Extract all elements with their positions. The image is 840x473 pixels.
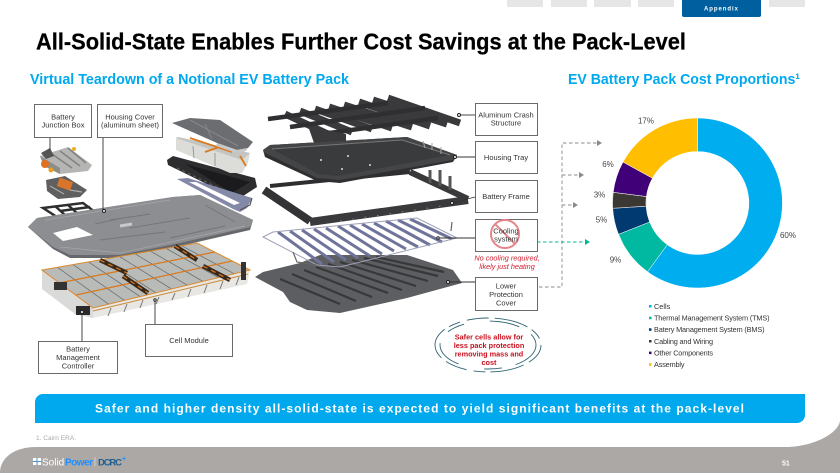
page number: 51 <box>782 460 790 468</box>
cooling system <box>263 218 457 267</box>
data labels: 17% <box>638 116 654 126</box>
callout box: lower protection cover: Protection <box>489 290 523 299</box>
data labels: 9% <box>610 256 621 264</box>
callout box: battery management controller: Management <box>56 353 101 362</box>
callout box: battery junction box <box>34 104 92 150</box>
housing cover plate <box>28 195 253 258</box>
callout box: cooling system <box>437 220 538 252</box>
small stack: cover <box>172 118 253 153</box>
heading: cost proportions: EV Battery Pack Cost Proportions¹ <box>568 71 800 88</box>
active tab label: Appendix <box>704 6 739 12</box>
navigation tabs <box>507 0 805 17</box>
electronics module <box>46 176 87 199</box>
legend: Thermal Management System (TMS) <box>654 314 770 322</box>
callout box: lower protection cover <box>446 278 538 310</box>
footer logo: Power <box>65 458 93 468</box>
junction frame <box>43 203 95 217</box>
data labels: 60% <box>780 231 796 240</box>
segment: thermal management 9% <box>618 222 667 272</box>
callout box: cell module: Cell Module <box>169 336 209 345</box>
heading: virtual teardown: Virtual Teardown of a Notional EV Battery Pack <box>30 71 350 88</box>
footer logo: + <box>122 456 126 463</box>
callout box: battery junction box: Battery <box>51 112 75 122</box>
data labels <box>594 116 796 264</box>
dashed connectors to donut <box>537 140 602 287</box>
callout box: battery junction box: Junction Box <box>42 120 85 130</box>
legend: Batery Management System (BMS) <box>654 325 764 334</box>
callout box: aluminum crash structure: Aluminum Crash <box>478 110 534 120</box>
footer band <box>0 420 840 473</box>
title: All-Solid-State Enables Further Cost Savings at the Pack-Level <box>36 28 686 54</box>
battery frame <box>264 170 468 222</box>
small stack: tray <box>167 156 257 198</box>
legend: Other Components <box>654 348 713 358</box>
callout text: less pack protection <box>454 341 524 350</box>
segment: cabling 3% <box>613 192 646 208</box>
data labels: 5% <box>596 216 607 224</box>
callout box: housing cover: Housing Cover <box>105 112 155 122</box>
footer logo: DCRC <box>98 458 122 468</box>
legend: Cells <box>654 302 671 311</box>
callout box: battery management controller: Battery <box>66 344 90 354</box>
icon: prohibited sign <box>491 220 519 248</box>
callout box: housing cover <box>98 104 162 212</box>
exploded battery pack illustration <box>28 98 468 318</box>
callout box: housing cover: (aluminum sheet) <box>101 120 159 130</box>
callout box: battery frame <box>450 180 538 212</box>
segment: cells 60% <box>648 118 782 288</box>
small stack: cells <box>176 137 250 173</box>
callout box: cell module <box>146 299 232 356</box>
callout box: aluminum crash structure <box>458 104 538 136</box>
callout box: aluminum crash structure: Structure <box>491 118 521 128</box>
dashed ellipse <box>435 318 541 372</box>
legend: Cabling and Wiring <box>654 337 713 346</box>
legend: Assembly <box>654 360 685 369</box>
callout box: battery management controller <box>38 310 118 374</box>
segment: battery management 5% <box>613 206 650 234</box>
data labels: 3% <box>594 190 605 200</box>
note: no cooling required: No cooling required, <box>474 254 540 262</box>
footer logo: Solid <box>42 458 64 468</box>
lower protection cover <box>255 255 462 313</box>
segment: assembly 17% <box>623 118 698 178</box>
callout text: Safer cells allow for <box>455 332 523 342</box>
small stack: cooling strip <box>177 178 252 212</box>
housing tray <box>263 137 457 183</box>
callout box: lower protection cover: Lower <box>496 282 517 290</box>
teal cooling arrow <box>537 239 590 245</box>
callout box: housing tray <box>454 142 538 174</box>
callout box: housing tray: Housing Tray <box>484 153 528 162</box>
note: no cooling required <box>474 254 540 271</box>
note: no cooling required: likely just heating <box>479 262 535 271</box>
footnote: 1. Cairn ERA. <box>36 435 76 442</box>
takeaway banner <box>35 394 805 423</box>
takeaway banner: Safer and higher density all-solid-state is expected to yield significant benefits at the pack-level <box>95 402 744 416</box>
callout text: removing mass and <box>455 350 523 358</box>
callout box: battery management controller: Controller <box>62 362 95 370</box>
callout: safer cells <box>435 318 541 372</box>
legend <box>649 302 770 369</box>
callout box: cooling system: system <box>494 234 518 244</box>
footer logo <box>33 456 126 468</box>
segment: other components 6% <box>613 162 652 196</box>
callout box: battery frame: Battery Frame <box>482 192 530 201</box>
data labels: 6% <box>602 160 614 169</box>
callout box: cooling system: Cooling <box>493 226 519 236</box>
donut chart: cost proportions <box>594 116 796 288</box>
callout text <box>454 332 524 367</box>
junction box part <box>40 147 92 174</box>
aluminum crash structure <box>268 98 460 147</box>
cell module tray <box>42 243 250 318</box>
callout box: lower protection cover: Cover <box>496 298 517 308</box>
callout text: cost <box>481 358 497 367</box>
